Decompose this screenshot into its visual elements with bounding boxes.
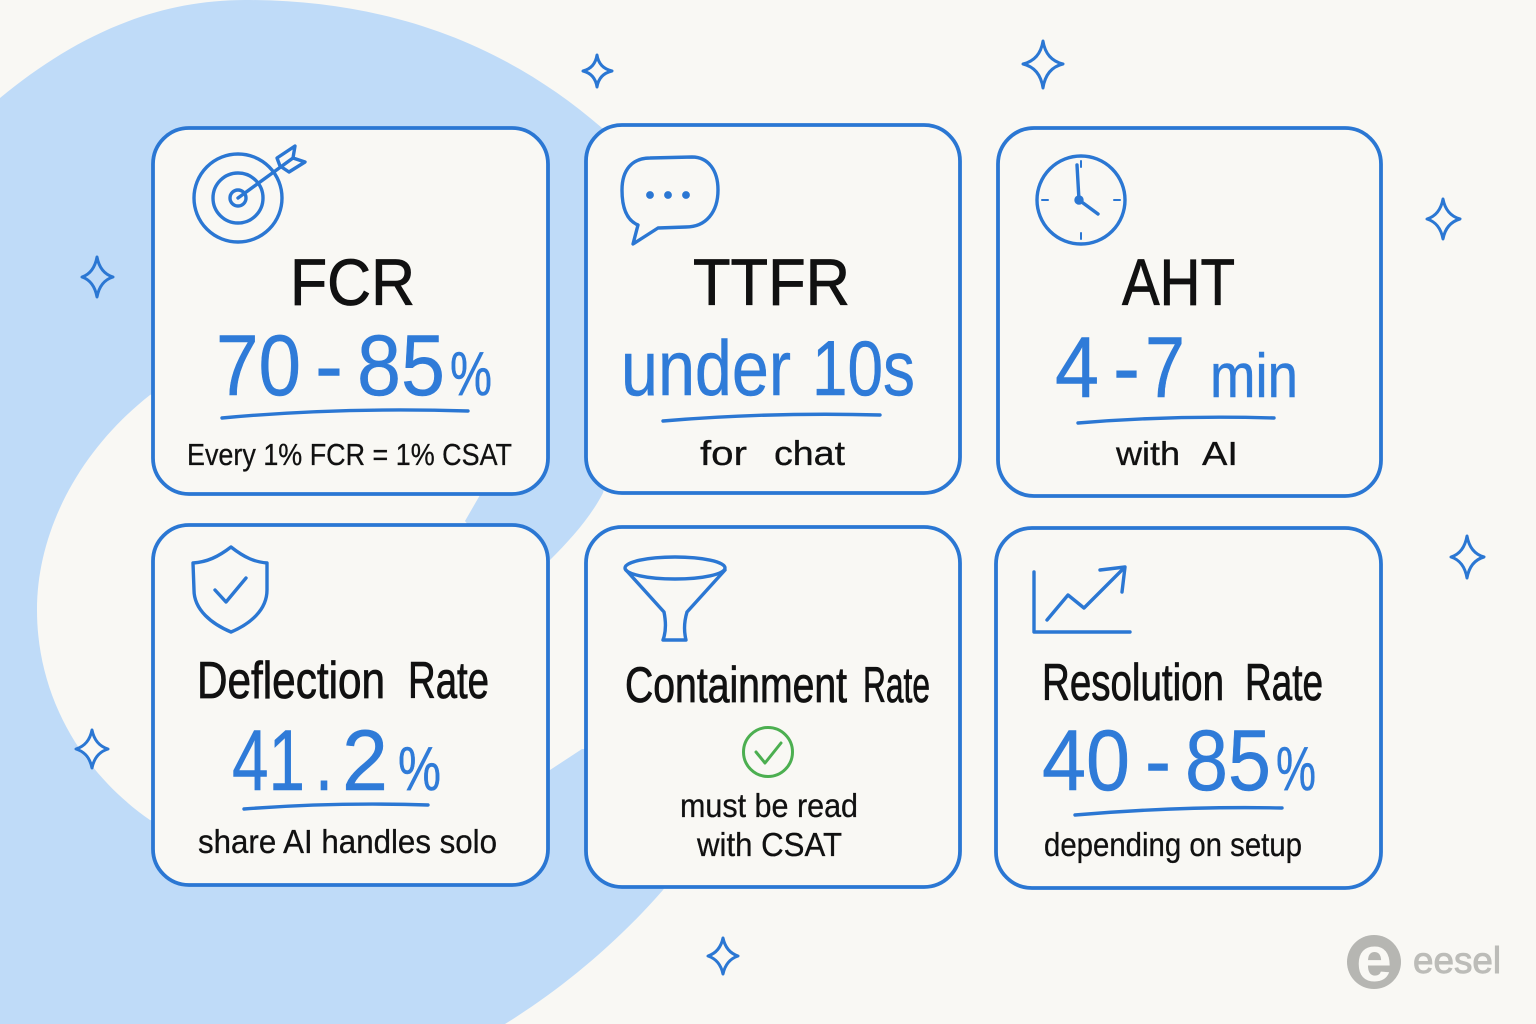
panel: AHT <box>998 128 1381 496</box>
heading: Deflection Rate: Deflection <box>197 652 385 710</box>
note: share AI handles solo <box>198 823 497 860</box>
icon: funnel <box>625 557 725 640</box>
value: 41.2%: . <box>315 713 333 809</box>
heading: Resolution Rate: Rate <box>1245 654 1323 712</box>
value: 70-85%: - <box>315 318 343 414</box>
heading: Containment Rate: Rate <box>863 657 930 713</box>
background blob <box>0 0 760 1024</box>
note line 1: must be read <box>680 787 858 824</box>
value: 4-7 min: 7 <box>1145 320 1185 416</box>
panel: Deflection Rate <box>153 525 548 885</box>
note: depending on setup <box>1044 826 1302 863</box>
note line 2: with CSAT <box>696 826 842 863</box>
underline <box>244 804 428 809</box>
logo: eesel <box>1347 923 1501 995</box>
value: 70-85%: 70 <box>216 318 301 414</box>
underline <box>222 410 468 418</box>
heading: Resolution Rate: Resolution <box>1042 654 1224 712</box>
note: for <box>700 435 747 473</box>
value: 4-7 min: 4 <box>1055 320 1099 416</box>
value: 40-85%: 40 <box>1042 713 1130 809</box>
value: 41.2%: 41 <box>232 713 305 809</box>
icon: green check circle <box>744 728 792 776</box>
icon: speech bubble <box>622 157 718 244</box>
value: 40-85%: 85 <box>1185 713 1271 809</box>
underline <box>1075 808 1282 815</box>
heading: AHT: AHT <box>1122 245 1235 319</box>
icon: target with arrow <box>194 146 305 242</box>
value: under 10s: under <box>621 324 791 412</box>
value: 40-85%: - <box>1145 713 1171 809</box>
icon: clock <box>1037 156 1125 244</box>
panel: Resolution Rate <box>996 528 1381 888</box>
underline <box>663 414 880 421</box>
panel: TTFR <box>586 125 960 493</box>
note: AI <box>1202 435 1238 472</box>
panel: Containment Rate <box>586 527 960 887</box>
icon: shield with check <box>193 547 267 632</box>
value: 70-85%: % <box>450 340 492 409</box>
value: 40-85%: % <box>1276 735 1316 804</box>
note: Every 1% FCR = 1% CSAT <box>187 437 512 472</box>
value: 70-85%: 85 <box>357 318 445 414</box>
note: with <box>1115 435 1180 472</box>
value: 41.2%: % <box>398 735 441 804</box>
note: chat <box>774 435 846 473</box>
value: 41.2%: 2 <box>342 713 388 809</box>
panel: FCR <box>153 128 548 494</box>
value: under 10s: 10s <box>812 324 915 412</box>
value: 4-7 min: - <box>1113 320 1140 416</box>
logo: eesel: e <box>1356 923 1392 995</box>
heading: Deflection Rate: Rate <box>408 652 489 710</box>
underline <box>1078 417 1274 423</box>
logo: eesel: eesel <box>1413 940 1501 981</box>
heading: FCR: FCR <box>290 245 415 319</box>
heading: Containment Rate: Containment <box>625 657 847 713</box>
icon: rising line chart <box>1034 567 1130 632</box>
value: 4-7 min: min <box>1210 342 1298 411</box>
heading: TTFR: TTFR <box>693 245 850 319</box>
